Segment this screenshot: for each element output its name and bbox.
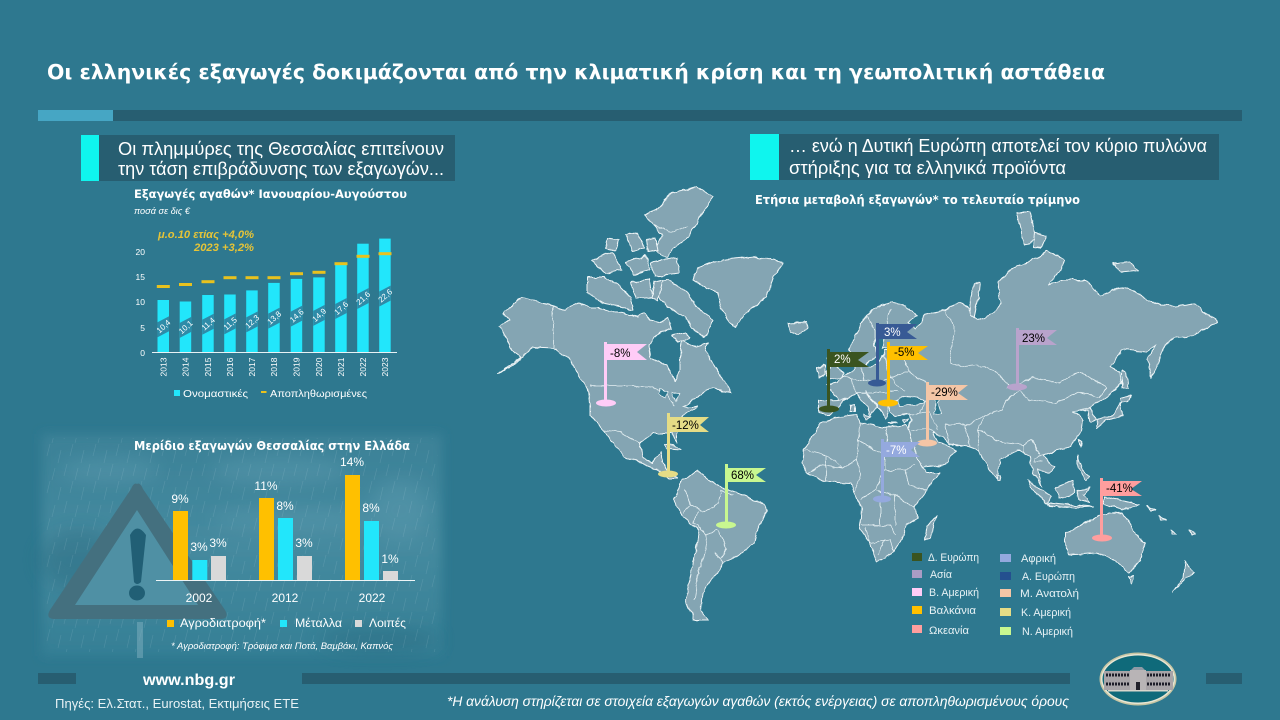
- map legend: Μ. Ανατολή: [1020, 588, 1079, 600]
- map legend: Ωκεανία: [929, 625, 970, 637]
- year labels: 2022: [359, 591, 386, 605]
- flag: South America 68%: [716, 464, 766, 528]
- chart title: Μερίδιο εξαγωγών Θεσσαλίας στην Ελλάδα: [134, 439, 410, 453]
- flag: South America 68%: 68%: [731, 470, 754, 482]
- bar value labels: 11,4: [200, 315, 217, 332]
- heading: left panel: Οι πλημμύρες της Θεσσαλίας επιτείνουν: [118, 139, 444, 159]
- share value labels: 11%: [254, 479, 278, 493]
- share value labels: 3%: [190, 540, 208, 554]
- chart unit note: ποσά σε δις €: [134, 206, 191, 216]
- heading: right panel: … ενώ η Δυτική Ευρώπη αποτελεί τον κύριο πυλώνα: [789, 136, 1207, 156]
- year labels: 2017: [247, 357, 257, 376]
- y axis labels: 15: [136, 272, 145, 282]
- share value labels: 3%: [209, 536, 227, 550]
- chart legend: Αγροδιατροφή*: [180, 618, 267, 630]
- bar value labels: 21,6: [355, 289, 373, 307]
- flag: Eastern Europe 3%: [868, 323, 917, 386]
- bar value labels: 10,4: [155, 318, 173, 335]
- year labels: 2021: [336, 357, 346, 376]
- flag: Oceania -41%: -41%: [1106, 483, 1133, 495]
- y axis labels: 20: [136, 247, 145, 257]
- North America: [498, 187, 732, 478]
- share bars: [173, 475, 398, 580]
- year labels: 2019: [292, 357, 302, 376]
- chart title: Εξαγωγές αγαθών* Ιανουαρίου-Αυγούστου: [134, 187, 407, 201]
- flag: Middle East -29%: [917, 382, 968, 446]
- icon: warning sign: [48, 484, 227, 658]
- share value labels: 14%: [340, 455, 364, 469]
- South America: [674, 470, 767, 620]
- flag: Africa -7%: [873, 439, 920, 502]
- Eurasia: [819, 250, 1218, 487]
- rain background: [40, 434, 442, 656]
- flag: North America -8%: -8%: [610, 348, 630, 360]
- flag: Western Europe 2%: [819, 349, 869, 412]
- map legend: Β. Αμερική: [929, 587, 979, 599]
- title: Οι ελληνικές εξαγωγές δοκιμάζονται από την κλιματική κρίση και τη γεωπολιτική αστάθεια: [47, 60, 1105, 84]
- footnote: * Αγροδιατροφή: Τρόφιμα και Ποτά, Βαμβάκι, Καπνός: [171, 641, 394, 651]
- flag: Asia 23%: 23%: [1022, 333, 1045, 345]
- bar value labels: 13,8: [266, 309, 284, 327]
- y axis labels: 10: [136, 297, 145, 307]
- flag: Central America -12%: [658, 413, 709, 478]
- map legend: Αφρική: [1021, 553, 1056, 565]
- map legend: Βαλκάνια: [929, 605, 977, 617]
- year labels: 2013: [158, 357, 168, 376]
- flag: Western Europe 2%: 2%: [834, 354, 851, 366]
- year labels: 2020: [314, 357, 324, 376]
- chart legend: Μέταλλα: [295, 618, 342, 630]
- y axis labels: [136, 247, 145, 358]
- chart legend: Αποπληθωρισμένες: [270, 388, 367, 400]
- year labels: 2016: [225, 357, 235, 376]
- heading: right panel: [750, 134, 1219, 180]
- x axis line: [152, 352, 397, 354]
- flag: Oceania -41%: [1092, 478, 1142, 542]
- bar value labels: 11,5: [222, 315, 239, 332]
- share value labels: 1%: [381, 552, 399, 566]
- year labels: 2012: [272, 591, 299, 605]
- European islands: [818, 358, 909, 425]
- analysis footnote: *Η ανάλυση στηρίζεται σε στοιχεία εξαγωγών αγαθών (εκτός ενέργειας) σε αποπληθωρισμένους όρους: [447, 694, 1069, 709]
- map legend: Ν. Αμερική: [1022, 626, 1073, 638]
- flag: Balkans -5%: [878, 342, 928, 406]
- Asia-Pacific islands: [970, 212, 1196, 535]
- growth annotation: [157, 229, 254, 254]
- Greenland and Iceland: [693, 256, 808, 335]
- panel: Thessaly export share: [40, 434, 442, 658]
- year labels: 2018: [269, 357, 279, 376]
- deflated dashes: [157, 252, 392, 288]
- year labels: 2022: [358, 357, 368, 376]
- world map: [498, 187, 1218, 620]
- Africa: [802, 415, 940, 562]
- axis line: [156, 580, 415, 582]
- map legend: Κ. Αμερική: [1021, 607, 1071, 619]
- Australia and New Zealand: [1065, 512, 1194, 592]
- year labels: 2014: [180, 357, 190, 376]
- map title: Ετήσια μεταβολή εξαγωγών* το τελευταίο τρίμηνο: [755, 193, 1080, 207]
- flag: Central America -12%: -12%: [672, 420, 699, 432]
- chart legend: Ονομαστικές: [183, 388, 248, 400]
- flag: Asia 23%: [1007, 328, 1057, 390]
- y axis labels: 0: [140, 348, 145, 358]
- bar value labels: [155, 286, 395, 338]
- map legend: Δ. Ευρώπη: [928, 552, 979, 564]
- share value labels: [171, 455, 399, 566]
- share value labels: 3%: [295, 536, 313, 550]
- flag: Africa -7%: -7%: [886, 445, 906, 457]
- growth annotation: 2023 +3,2%: [193, 242, 254, 254]
- bar value labels: 14,9: [311, 306, 329, 324]
- share value labels: 9%: [171, 492, 189, 506]
- heading: right panel: στήριξης για τα ελληνικά προϊόντα: [789, 158, 1066, 178]
- heading: left panel: την τάση επιβράδυνσης των εξαγωγών...: [118, 159, 444, 179]
- share value labels: 8%: [276, 499, 294, 513]
- year labels: [186, 591, 386, 605]
- chart legend: [167, 618, 406, 630]
- bar value labels: 14,6: [288, 307, 306, 325]
- flag: Balkans -5%: -5%: [894, 347, 914, 359]
- logo: NBG building: [1100, 652, 1176, 706]
- share value labels: 8%: [362, 501, 380, 515]
- bar value labels: 10,1: [177, 318, 195, 336]
- website: www.nbg.gr: [142, 672, 235, 689]
- year labels: 2002: [186, 591, 213, 605]
- chart legend: [174, 388, 367, 400]
- bar value labels: 17,6: [333, 299, 351, 317]
- flag: North America -8%: [596, 342, 647, 406]
- heading: left panel: [81, 135, 455, 181]
- map legend: Ασία: [930, 569, 953, 581]
- map flags: [596, 323, 1142, 542]
- nominal bars: [158, 239, 391, 352]
- year labels: 2023: [380, 357, 390, 376]
- year labels: [158, 357, 390, 376]
- map legend: [912, 552, 1079, 638]
- year labels: 2015: [203, 357, 213, 376]
- panel: goods exports bar chart: [134, 187, 407, 400]
- bar value labels: 22,6: [377, 287, 395, 304]
- bar value labels: 12,3: [244, 313, 262, 330]
- flag: Middle East -29%: -29%: [931, 387, 958, 399]
- chart legend: Λοιπές: [369, 618, 406, 630]
- y axis labels: 5: [140, 323, 145, 333]
- sources: Πηγές: Ελ.Στατ., Eurostat, Εκτιμήσεις ΕΤΕ: [55, 696, 299, 711]
- flag: Eastern Europe 3%: 3%: [884, 327, 901, 339]
- top divider bar: [38, 110, 1242, 121]
- footer bars: [38, 673, 1242, 684]
- map legend: Α. Ευρώπη: [1022, 571, 1075, 583]
- growth annotation: μ.ο.10 ετίας +4,0%: [157, 229, 254, 241]
